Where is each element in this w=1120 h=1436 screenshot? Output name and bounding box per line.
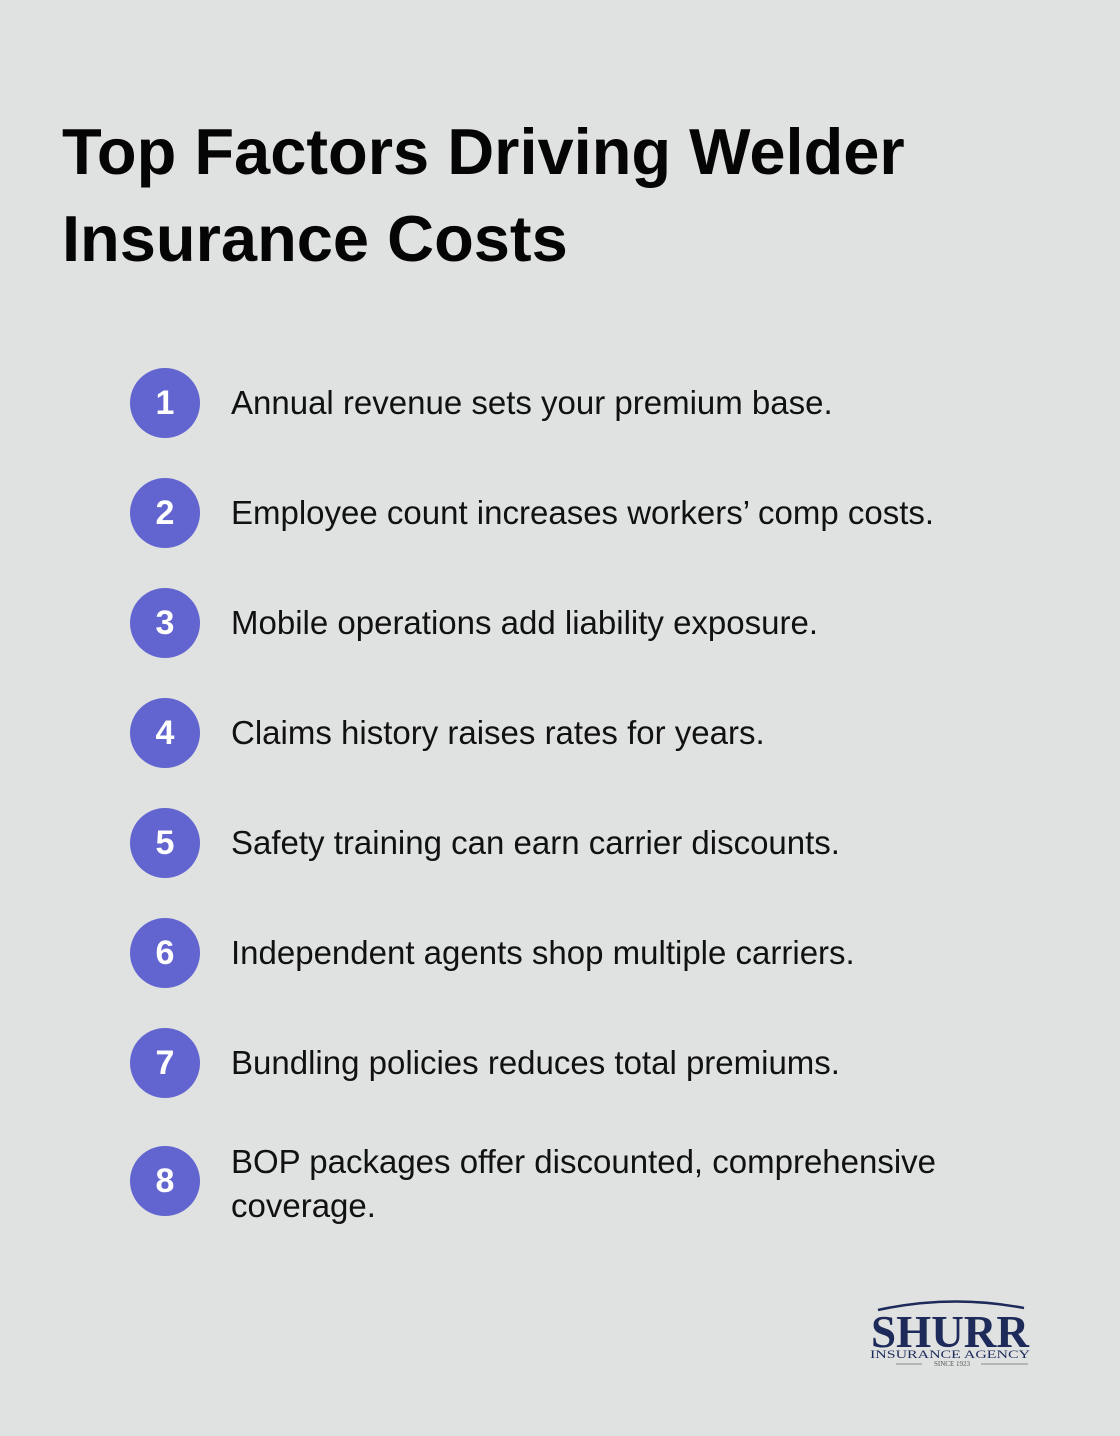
item 3: 3: [156, 604, 174, 642]
item 1: Annual revenue sets your premium base.: [231, 384, 833, 421]
logo: INSURANCE AGENCY: [870, 1347, 1030, 1361]
item 8: BOP packages offer discounted, comprehensive: [231, 1143, 936, 1180]
item 6: 6: [156, 934, 174, 972]
item 4: Claims history raises rates for years.: [231, 714, 765, 751]
item 2: Employee count increases workers’ comp costs.: [231, 494, 934, 531]
item 8: 8: [156, 1162, 174, 1200]
item 3: Mobile operations add liability exposure.: [231, 604, 818, 641]
item 7: 7: [156, 1044, 174, 1082]
item 1: [130, 368, 833, 438]
title: Insurance Costs: [62, 202, 568, 275]
item 7: [130, 1028, 840, 1098]
item 6: [130, 918, 855, 988]
item 8: coverage.: [231, 1187, 376, 1224]
item 4: 4: [156, 714, 174, 752]
item 2: 2: [156, 494, 174, 532]
title: Top Factors Driving Welder: [62, 115, 905, 188]
item 5: [130, 808, 840, 878]
logo: SINCE 1923: [934, 1360, 970, 1368]
item 1: 1: [156, 384, 174, 422]
item 5: 5: [156, 824, 174, 862]
item 2: [130, 478, 934, 548]
item 5: Safety training can earn carrier discounts.: [231, 824, 840, 861]
item 3: [130, 588, 818, 658]
item 7: Bundling policies reduces total premiums.: [231, 1044, 840, 1081]
item 4: [130, 698, 765, 768]
title: [62, 115, 905, 275]
item 8: [130, 1143, 936, 1224]
logo: SHURR: [871, 1306, 1030, 1357]
item 6: Independent agents shop multiple carriers.: [231, 934, 855, 971]
